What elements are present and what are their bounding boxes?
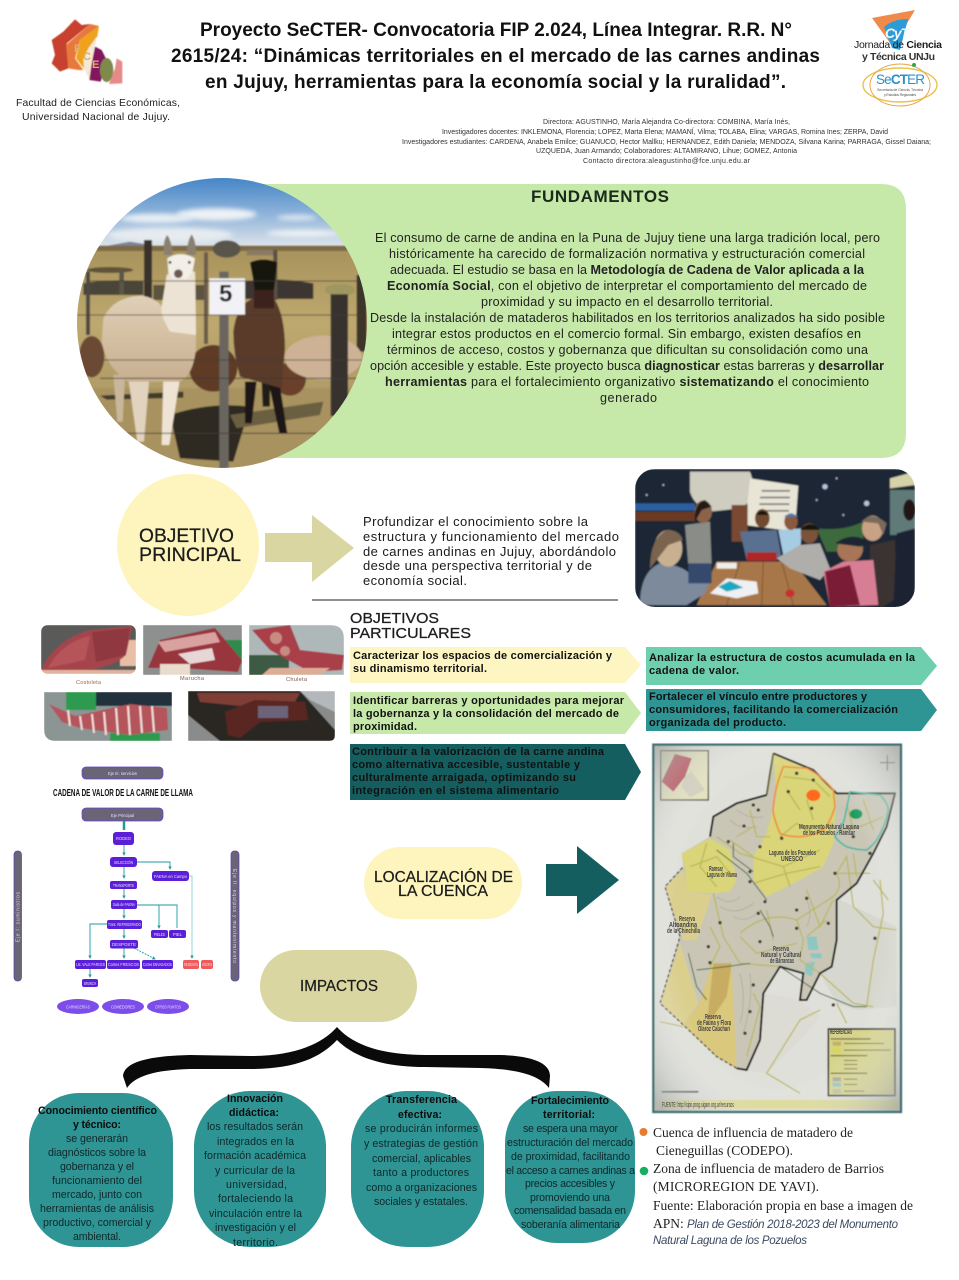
map labels: de los Pozuelos · Ramsar: [803, 830, 855, 837]
ovals: puntos de venta: CARNICERÍAS: [66, 1004, 90, 1010]
main territory: [660, 753, 895, 1070]
card: transferencia efectiva: y estrategias de gestión: [364, 1138, 478, 1150]
chart: cadena de valor de la carne de llama: VISCERAS: [202, 962, 212, 967]
logos: Jornada de Ciencia y Técnica and SeCTER: [854, 10, 942, 106]
card: transferencia efectiva: [351, 1091, 484, 1247]
circle: objetivo principal: OBJETIVO: [139, 526, 234, 547]
map labels: de Barrancas: [770, 958, 794, 965]
authors: Investigadores estudiantes: CARDENA, Anabela Emilce; GUANUCO, Hector Mallku; HERNANDEZ, Edith Daniela; MENDOZA, Silvana Karina; PARRAGA, Gissel Daiana;: [402, 139, 931, 146]
banner: analizar: cadena de valor.: [649, 665, 739, 677]
card: innovación didáctica: vinculación entre la: [209, 1208, 302, 1220]
card: conocimiento científico y técnico: herramientas de análisis: [40, 1203, 154, 1215]
card: conocimiento científico y técnico: diagnósticos sobre la: [48, 1147, 146, 1159]
logo: Facultad de Ciencias Económicas: F: [74, 43, 81, 55]
pill: localización de la cuenca: LA CUENCA: [398, 883, 489, 900]
card: fortalecimiento territorial: precios accesibles y: [525, 1178, 616, 1190]
photo: llamas: [70, 175, 370, 472]
scale and source strip: [659, 1100, 898, 1109]
map legend: Plan de Gestión 2018-2023 del Monumento: [687, 1219, 899, 1231]
card: fortalecimiento territorial: comensalidad basada en: [514, 1205, 626, 1217]
card: fortalecimiento territorial: soberanía alimentaria: [521, 1219, 620, 1231]
card: transferencia efectiva: Transferencia: [386, 1094, 457, 1106]
card: fortalecimiento territorial: promoviendo una: [530, 1192, 610, 1204]
map labels: Natural y Cultural: [761, 952, 801, 959]
banner: contribuir: Contribuir a la valorización de la carne andina: [352, 746, 605, 758]
side bar: eje equipos y mantenimiento: Eje II: equipos y mantenimiento: [231, 869, 237, 963]
banner: fortalecer: consumidores, facilitando la comercialización: [649, 704, 898, 716]
flow labels: Sala de FAENA: [113, 902, 136, 907]
caption: costoleta: Costoleta: [76, 680, 102, 686]
map: Jujuy: [653, 744, 902, 1113]
water: [805, 937, 822, 977]
caption: marucha: Marucha: [180, 676, 205, 682]
card: innovación didáctica: y curricular de la: [215, 1165, 295, 1177]
text block: fundamentos: integrar estos productos en el comercio formal. Sin embargo, existen desafíos en: [392, 327, 861, 341]
banner: fortalecer: organizada del producto.: [649, 717, 786, 729]
map legend: Cieneguillas (CODEPO).: [656, 1143, 793, 1158]
pill: eje principal: [82, 808, 163, 821]
banner: caracterizar: Caracterizar los espacios de comercialización y: [353, 650, 613, 662]
authors: [402, 119, 931, 165]
pill: localización de la cuenca: LOCALIZACIÓN DE: [374, 869, 513, 886]
map labels: UNESCO: [781, 856, 803, 863]
connectors: [90, 821, 192, 977]
banner: fortalecer: [646, 689, 937, 731]
flow labels: BRUNCH: [84, 981, 96, 986]
card: fortalecimiento territorial: territorial:: [543, 1109, 595, 1121]
card: conocimiento científico y técnico: y técnico:: [73, 1119, 121, 1131]
card: transferencia efectiva: efectiva:: [398, 1109, 442, 1121]
title: 2615/24: “Dinámicas territoriales en el mercado de las carnes andinas: [171, 46, 820, 67]
text block: fundamentos: generado: [600, 391, 657, 405]
card: transferencia efectiva: tanto a productores: [373, 1167, 469, 1179]
text block: objetivo principal: estructura y funcionamiento del mercado: [363, 529, 619, 544]
logos: Jornada de Ciencia y Técnica and SeCTER: y Técnica UNJu: [862, 51, 935, 63]
flow labels: RODEO: [116, 836, 131, 841]
banner: identificar: [350, 692, 641, 734]
pill: eje principal: Eje Principal: [111, 813, 134, 818]
banner: caracterizar: su dinamismo territorial.: [353, 663, 487, 675]
map labels: de la Chinchilla: [667, 928, 700, 935]
card: conocimiento científico y técnico: Conocimiento científico: [38, 1105, 158, 1117]
title: Proyecto SeCTER- Convocatoria FIP 2.024, Línea Integrar. R.R. N°: [200, 20, 792, 41]
heading: objetivos particulares: OBJETIVOS: [350, 610, 439, 627]
card: fortalecimiento territorial: de proximidad, facilitando: [511, 1151, 630, 1163]
red boxes: [183, 960, 213, 969]
text block: fundamentos: opción accesible y estable. Este proyecto busca diagnosticar estas barreras y desarrollar: [370, 359, 884, 373]
influence outlines: [773, 767, 835, 837]
compass: [880, 755, 895, 771]
flow labels: PIEL: [173, 932, 182, 937]
banner: contribuir: culturalmente arraigada, optimizando su: [352, 772, 576, 784]
flow labels: [76, 836, 187, 986]
card: innovación didáctica: universidad,: [226, 1179, 287, 1191]
banner: analizar: Analizar la estructura de costos acumulada en la: [649, 652, 916, 664]
logo: Facultad de Ciencias Económicas: Facultad de Ciencias Económicas,: [16, 98, 180, 109]
ovals: puntos de venta: [57, 999, 189, 1014]
text block: objetivo principal: de carnes andinas en Jujuy, abordándolo: [363, 544, 616, 559]
card: conocimiento científico y técnico: se generarán: [66, 1133, 128, 1145]
card: conocimiento científico y técnico: funcionamiento del: [52, 1175, 142, 1187]
text block: fundamentos: Economía Social, con el objetivo de interpretar el comportamiento del mercado de: [387, 279, 867, 293]
photo: llamas: 5: [219, 281, 232, 308]
map legend: [640, 1125, 913, 1247]
photo: marucha: [143, 625, 242, 675]
card: conocimiento científico y técnico: productivo, comercial y: [43, 1217, 152, 1229]
fence post and sign: [331, 294, 348, 416]
dark llama: [233, 259, 287, 433]
side bar: eje suministros: [14, 851, 22, 981]
brace: impactos: [123, 1027, 550, 1088]
banner: identificar: la gobernanza y la consolidación del mercado de: [353, 708, 619, 720]
white llama: [102, 234, 196, 445]
logo: Facultad de Ciencias Económicas: C: [83, 51, 91, 63]
photos: cortes de carne: [41, 625, 344, 741]
map labels: Reserva: [705, 1014, 721, 1021]
banner: identificar: Identificar barreras y oportunidades para mejorar: [353, 695, 625, 707]
resting llamas: [189, 345, 237, 392]
photo: costillar: [44, 692, 172, 741]
red boxes: RESIDUOS: [184, 962, 198, 967]
flow labels: Tmnt. REFRIGERADO: [108, 922, 141, 927]
authors: Directora: AGUSTINHO, María Alejandra Co-directora: COMBINA, María Inés,: [543, 119, 790, 126]
flow boxes: [75, 832, 189, 987]
inset: [661, 751, 708, 800]
card: transferencia efectiva: sociales y estatales.: [374, 1196, 468, 1208]
people: [640, 499, 915, 608]
card: conocimiento científico y técnico: [29, 1093, 173, 1247]
card: innovación didáctica: didáctica:: [229, 1107, 279, 1119]
map labels: Reserva: [773, 946, 789, 953]
banner: contribuir: [350, 744, 641, 800]
card: conocimiento científico y técnico: ambiental.: [73, 1231, 121, 1243]
logos: Jornada de Ciencia y Técnica and SeCTER: Jornada de Ciencia: [854, 39, 942, 51]
logo: Facultad de Ciencias Económicas: E: [92, 59, 99, 71]
map labels: Laguna de los Pozuelos: [769, 850, 816, 857]
card: transferencia efectiva: se producirán informes: [365, 1123, 478, 1135]
side bar: eje suministros: Eje I: suministros: [16, 892, 22, 942]
text block: fundamentos: términos de acceso, costos y gobernanza que dificultan su consolidación como una: [387, 343, 868, 357]
side bar: eje equipos y mantenimiento: [231, 851, 239, 981]
text block: objetivo principal: economía social.: [363, 573, 467, 588]
circle: objetivo principal: [117, 474, 259, 616]
map labels: [662, 824, 859, 1109]
roads: [660, 777, 897, 1093]
card: innovación didáctica: formación académica: [204, 1150, 306, 1162]
card: innovación didáctica: los resultados serán: [207, 1121, 303, 1133]
card: innovación didáctica: Innovación: [227, 1093, 283, 1105]
card: fortalecimiento territorial: Fortalecimiento: [531, 1095, 610, 1107]
banner: analizar: [646, 647, 937, 685]
flow labels: SELECCIÓN: [114, 859, 133, 865]
map labels: Reserva: [679, 916, 695, 923]
map labels: Monumento Natural Laguna: [799, 824, 859, 831]
east area: [820, 897, 897, 1010]
text block: fundamentos: El consumo de carne de andina en la Puna de Jujuy tiene una larga tradición local, pero: [375, 231, 880, 245]
card: conocimiento científico y técnico: mercado, junto con: [52, 1189, 142, 1201]
map labels: REFERENCIAS: [830, 1029, 852, 1036]
flow labels: FAENA en Campo: [154, 874, 187, 879]
posts: [144, 240, 152, 298]
pill: eje servicios: Eje III. servicios: [108, 771, 138, 776]
banner: fortalecer: Fortalecer el vínculo entre productores y: [649, 691, 868, 703]
map labels: Laguna de Vilama: [707, 872, 737, 879]
legend box: [828, 1029, 895, 1096]
borders: [660, 753, 895, 1070]
logos: Jornada de Ciencia y Técnica and SeCTER: SeCTER: [876, 72, 925, 87]
banner: identificar: proximidad.: [353, 721, 417, 733]
title: [171, 20, 820, 93]
map legend: Cuenca de influencia de matadero de: [653, 1125, 853, 1140]
ovals: puntos de venta: OTROS PUNTOS: [155, 1004, 181, 1010]
towns: [707, 772, 877, 1035]
map labels: Altoandina: [669, 922, 697, 929]
authors: Investigadores docentes: INKLEMONA, Florencia; LOPEZ, Marta Elena; MAMANÍ, Vilma; TOLABA, Elina; VARGAS, Romina Ines; ZERPA, David: [442, 127, 888, 136]
card: fortalecimiento territorial: se espera una mayor: [523, 1123, 618, 1135]
card: fortalecimiento territorial: el acceso a carnes andinas a: [506, 1165, 635, 1177]
heading: fundamentos: FUNDAMENTOS: [531, 187, 669, 206]
map legend: (MICROREGION DE YAVI).: [653, 1179, 819, 1194]
pill: eje servicios: [82, 767, 163, 779]
vignette: [653, 744, 902, 1113]
card: fortalecimiento territorial: estructuración del mercado: [507, 1137, 633, 1149]
card: innovación didáctica: [194, 1091, 326, 1249]
authors: Contacto directora:aleagustinho@fce.unju.edu.ar: [583, 158, 751, 165]
text block: objetivo principal: Profundizar el conocimiento sobre la: [363, 514, 589, 529]
card: transferencia efectiva: comercial, aplicables: [372, 1153, 471, 1165]
terrain texture: [717, 810, 810, 1033]
banner: contribuir: como alternativa accesible, sustentable y: [352, 759, 581, 771]
card: innovación didáctica: territorio.: [233, 1237, 278, 1249]
logos: Jornada de Ciencia y Técnica and SeCTER: CyT: [885, 25, 910, 41]
text block: objetivo principal: [363, 514, 619, 588]
icon: green dot: [640, 1167, 648, 1175]
heading: objetivos particulares: PARTICULARES: [350, 625, 471, 642]
logos: Jornada de Ciencia y Técnica and SeCTER: y Estudios Regionales: [884, 93, 916, 97]
text block: fundamentos: [370, 231, 885, 405]
circle: objetivo principal: PRINCIPAL: [139, 545, 241, 566]
logo: Facultad de Ciencias Económicas: Universidad Nacional de Jujuy.: [22, 112, 170, 123]
card: conocimiento científico y técnico: gobernanza y el: [60, 1161, 134, 1173]
flow labels: TRANSPORTE: [113, 883, 134, 888]
heading: objetivos particulares: [350, 610, 471, 642]
banner: contribuir: integración en el sistema alimentario: [352, 785, 559, 797]
photo: reunión grupal: [635, 469, 915, 609]
chart: cadena de valor de la carne de llama: [14, 767, 239, 1014]
map labels: Olaroz Cauchari: [698, 1026, 730, 1033]
text block: fundamentos: Desde la instalación de mataderos habilitados en los territorios analizados ha sido posible: [370, 311, 885, 325]
photo: chuleta: [249, 625, 344, 675]
arrow: objetivo principal: [265, 515, 354, 582]
text block: objetivo principal: desde una perspectiva territorial y de: [363, 558, 592, 573]
ovals: puntos de venta: COMEDORES: [111, 1004, 135, 1010]
card: innovación didáctica: investigación y el: [215, 1222, 296, 1234]
flow labels: Lst. VALE PARCES: [76, 962, 105, 967]
caption: chuleta: Chuleta: [286, 677, 308, 683]
text block: fundamentos: proximidad y su impacto en el desarrollo territorial.: [481, 295, 773, 309]
text block: fundamentos: adecuada. El estudio se basa en la Metodología de Cadena de Valor aplicada a la: [390, 263, 865, 277]
flow labels: PIELES: [154, 932, 165, 937]
heading: cadena de valor: CADENA DE VALOR DE LA CARNE DE LLAMA: [53, 788, 193, 799]
card: fortalecimiento territorial: [505, 1091, 635, 1243]
card: innovación didáctica: integrados en la: [217, 1136, 294, 1148]
flow labels: Cortes ENVASADOS: [143, 962, 172, 967]
flow labels: DESPOSTE: [112, 942, 136, 947]
arrow: localización: [546, 846, 619, 914]
card: transferencia efectiva: como a organizaciones: [366, 1182, 477, 1194]
map legend: Natural Laguna de los Pozuelos: [653, 1235, 807, 1247]
pill: localización de la cuenca: [364, 847, 522, 919]
protected areas: [753, 753, 837, 897]
map legend: Fuente: Elaboración propia en base a imagen de: [653, 1198, 913, 1213]
card: innovación didáctica: fortaleciendo la: [218, 1193, 293, 1205]
panel: fundamentos: [230, 184, 906, 458]
photo: carne en mesa: [188, 691, 335, 741]
map labels: Ramsar: [709, 866, 723, 873]
photo: costoleta: [41, 625, 136, 674]
text block: fundamentos: herramientas para el fortalecimiento organizativo sistematizando el conocimiento: [385, 375, 869, 389]
authors: UZQUEDA, Juan Armando; Colaboradores: ALTAMIRANO, Lihue; GOMEZ, Antonia: [536, 148, 797, 155]
table: [697, 562, 827, 605]
map legend: Zona de influencia de matadero de Barrios: [653, 1161, 884, 1176]
logos: Jornada de Ciencia y Técnica and SeCTER: Secretaría de Ciencia, Técnica: [877, 88, 923, 92]
logo: Facultad de Ciencias Económicas: [16, 19, 180, 123]
banner: caracterizar: [350, 647, 641, 683]
map legend: APN:: [653, 1216, 684, 1231]
flow labels: Cortes FRESCOS: [108, 962, 139, 967]
map labels: FUENTE: http://sipn.prog.sigam.org.ar/recursos: [662, 1102, 734, 1109]
icon: orange dot: [640, 1128, 648, 1136]
text block: fundamentos: históricamente ha carecido de formalización normativa y estructuración comercial: [389, 247, 865, 261]
pill: impactos: [260, 950, 417, 1022]
title: en Jujuy, herramientas para la economía social y la ruralidad”.: [205, 72, 786, 93]
map labels: de Fauna y Flora: [697, 1020, 731, 1027]
pill: impactos: IMPACTOS: [300, 978, 378, 995]
